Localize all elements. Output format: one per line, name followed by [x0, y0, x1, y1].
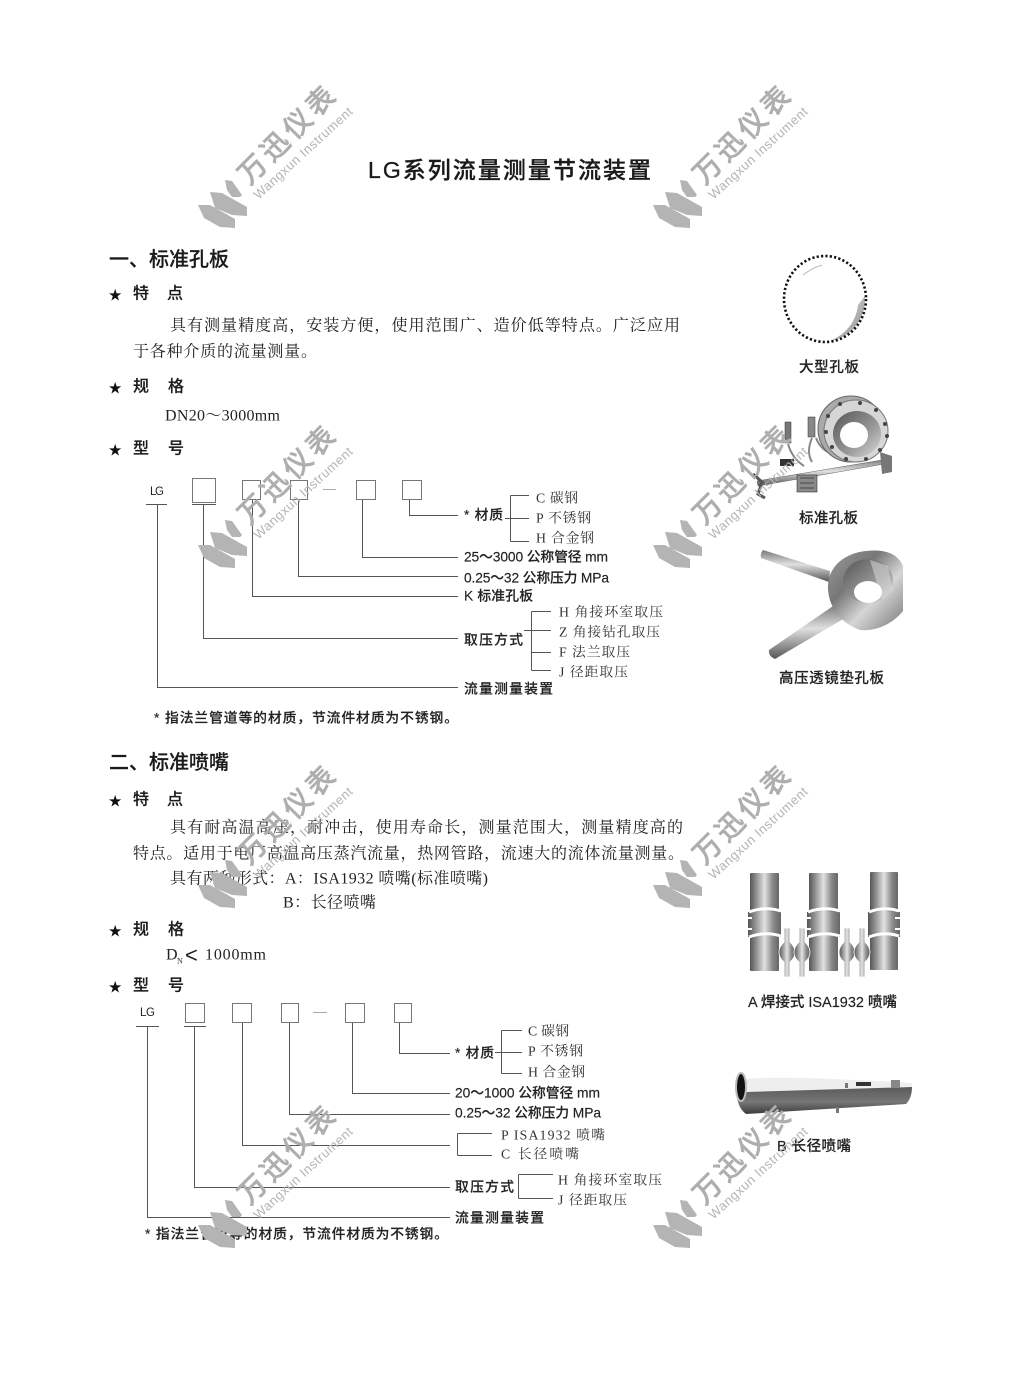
subheading: model: 型 号 [133, 976, 184, 994]
option labels: H 角接环室取压 [559, 604, 663, 620]
heading: section 2: 二、标准喷嘴 [109, 751, 229, 774]
option labels: * 材质 [455, 1046, 494, 1060]
image: high pressure lens gasket orifice plate [761, 550, 903, 659]
text block: features description: 于各种介质的流量测量。 [133, 342, 317, 360]
pipe left [747, 873, 781, 971]
option labels: C 长径喷嘴 [501, 1146, 579, 1162]
watermark: row 1 left: 万迅仪表 [232, 78, 344, 190]
subheading: features: 特 点 [133, 284, 183, 302]
option labels: C 碳钢 [528, 1024, 569, 1038]
nozzle type bracket [458, 1134, 492, 1156]
small nozzles [779, 928, 870, 977]
option labels: 取压方式 [464, 632, 523, 648]
text: size range: N [177, 956, 183, 966]
option labels: F 法兰取压 [559, 644, 630, 660]
panel: section 1 standard orifice plate [108, 248, 680, 726]
watermark: row 3 left [198, 758, 356, 908]
text: size range: 1000mm [205, 946, 267, 964]
star bullet: model: ★ [108, 440, 122, 460]
watermark: row 3 left: Wangxun Instrument [250, 784, 356, 882]
connector lines [158, 500, 458, 688]
watermark: row 3 right [653, 758, 811, 908]
watermark: row 2 right [653, 418, 811, 568]
text: size range: DN20～3000mm [165, 408, 281, 424]
watermark: row 2 left [198, 418, 356, 568]
option labels: P ISA1932 喷嘴 [501, 1126, 605, 1142]
caption: high pressure lens gasket orifice plate: 高压透镜垫孔板 [779, 669, 884, 687]
option labels: P 不锈钢 [528, 1044, 583, 1058]
connector lines [148, 1023, 450, 1218]
watermark: row 4 right [653, 1098, 811, 1248]
watermark: row 3 left: 万迅仪表 [232, 758, 344, 870]
option labels: K 标准孔板 [464, 588, 533, 604]
code boxes [136, 1004, 412, 1026]
code prefix LG: LG [150, 486, 164, 498]
pressure tapping bracket [524, 612, 551, 670]
star bullet: specification: ★ [108, 922, 122, 940]
image: large orifice plate [784, 256, 866, 342]
watermark: row 2 right: Wangxun Instrument [705, 444, 811, 542]
star bullet: features: ★ [108, 286, 122, 304]
text block: features description: 特点。适用于电厂高温高压蒸汽流量，热网管路，流速大的流体流量测量。 [133, 844, 684, 862]
option labels: 流量测量装置 [455, 1210, 544, 1226]
watermark: row 4 left: Wangxun Instrument [250, 1124, 356, 1222]
watermark: row 4 right: 万迅仪表 [687, 1098, 799, 1210]
heading: section 1: 一、标准孔板 [109, 248, 229, 271]
watermark: row 1 right: Wangxun Instrument [705, 104, 811, 202]
option labels: 0.25～32 公称压力 MPa [455, 1106, 601, 1120]
watermark: row 3 right: Wangxun Instrument [705, 784, 811, 882]
text block: features description [133, 316, 680, 360]
option labels: H 角接环室取压 [558, 1172, 662, 1188]
option labels: H 合金钢 [528, 1064, 585, 1080]
subheading: model: 型 号 [133, 440, 184, 458]
footnote 1: * 指法兰管道等的材质，节流件材质为不锈钢。 [154, 710, 458, 726]
star bullet: features: ★ [108, 792, 122, 810]
material bracket [495, 1030, 522, 1074]
option labels: 取压方式 [455, 1178, 514, 1194]
caption: standard orifice plate: 标准孔板 [799, 510, 858, 527]
caption: long radius nozzle: B 长径喷嘴 [777, 1138, 851, 1155]
watermark: row 2 left: Wangxun Instrument [250, 444, 356, 542]
option labels: C 碳钢 [536, 490, 578, 506]
option labels: J 径距取压 [558, 1192, 627, 1208]
watermark: row 1 left: Wangxun Instrument [250, 104, 356, 202]
pipe right [868, 872, 900, 970]
option labels: H 合金钢 [536, 530, 594, 546]
subheading: features: 特 点 [133, 790, 183, 808]
watermark: row 4 right: Wangxun Instrument [705, 1124, 811, 1222]
image: weld type ISA1932 nozzle [747, 872, 900, 977]
title: LG系列流量测量节流装置 [368, 157, 651, 183]
code boxes [146, 478, 422, 504]
watermark: row 4 left: 万迅仪表 [232, 1098, 344, 1210]
watermark: row 1 right: 万迅仪表 [687, 78, 799, 190]
option labels: P 不锈钢 [536, 510, 591, 526]
pressure tapping bracket [518, 1174, 553, 1198]
text block: features description: 具有耐高温高压，耐冲击，使用寿命长，测量范围大，测量精度高的 [170, 818, 683, 836]
watermark: row 1 left [198, 78, 356, 228]
option labels: J 径距取压 [559, 664, 628, 680]
star bullet: model: ★ [108, 978, 122, 996]
watermark: row 2 left: 万迅仪表 [232, 418, 344, 530]
image: standard orifice plate [753, 396, 892, 498]
text: size range [166, 942, 267, 968]
option labels: Z 角接钻孔取压 [559, 624, 660, 640]
option labels: 0.25～32 公称压力 MPa [464, 570, 609, 586]
text: size range: < [185, 942, 198, 968]
material bracket [505, 496, 529, 542]
text block: features description: 具有两种形式：A：ISA1932 喷嘴(标准喷嘴) [170, 870, 488, 888]
watermark: row 1 right [653, 78, 811, 228]
image: long radius nozzle [736, 1073, 912, 1114]
text block: features description: B：长径喷嘴 [283, 894, 376, 912]
code prefix LG: LG [140, 1007, 155, 1019]
watermark: row 2 right: 万迅仪表 [687, 418, 799, 530]
panel: section 2 standard nozzle [108, 751, 684, 1242]
diagram: model code 1 [146, 478, 663, 696]
star bullet: specification: ★ [108, 378, 122, 398]
option labels: 25～3000 公称管径 mm [464, 548, 608, 564]
option labels: 20～1000 公称管径 mm [455, 1084, 600, 1100]
subheading: specification: 规 格 [133, 920, 184, 938]
text block: features description [133, 818, 684, 912]
watermark: row 3 right: 万迅仪表 [687, 758, 799, 870]
text: size range: D [166, 946, 178, 964]
pipe centre [806, 873, 840, 971]
subheading: specification: 规 格 [133, 378, 184, 396]
option labels [464, 490, 663, 696]
diagram: model code 2 [136, 1004, 662, 1226]
caption: weld type nozzle: A 焊接式 ISA1932 喷嘴 [748, 994, 897, 1011]
option labels [455, 1024, 662, 1226]
caption: large orifice plate: 大型孔板 [799, 359, 860, 376]
text block: features description: 具有测量精度高，安装方便，使用范围广、造价低等特点。广泛应用 [170, 316, 680, 334]
option labels: 流量测量装置 [464, 682, 553, 696]
option labels: * 材质 [464, 508, 503, 522]
watermark: row 4 left [198, 1098, 356, 1248]
footnote 2: * 指法兰管道等的材质，节流件材质为不锈钢。 [145, 1226, 448, 1242]
